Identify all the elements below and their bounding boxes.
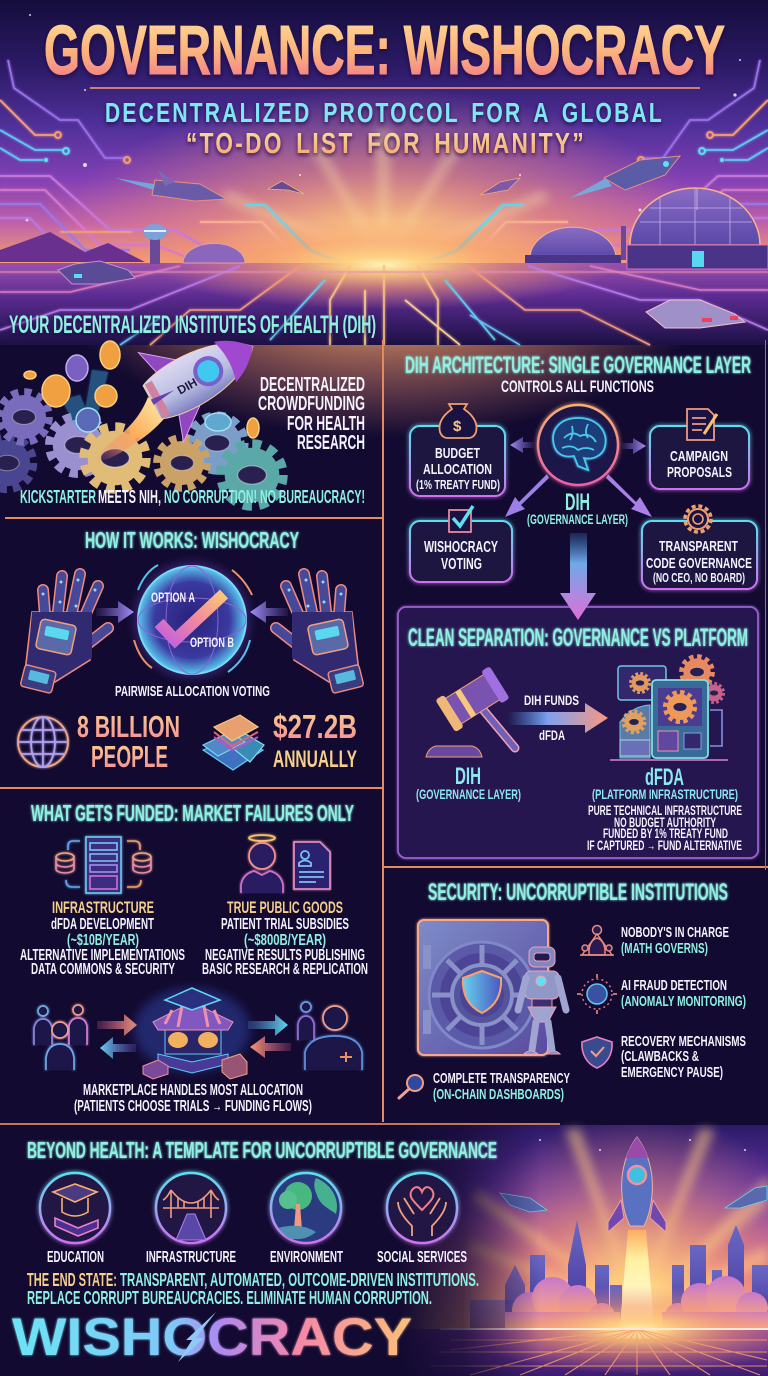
icon: platform machine <box>610 656 728 760</box>
exhaust <box>620 1230 654 1325</box>
icon: money bag: $ <box>453 418 462 435</box>
item: transparency: COMPLETE TRANSPARENCY <box>433 1070 570 1087</box>
icon labels <box>47 1249 467 1266</box>
column: true public goods: (~$800B/YEAR) <box>244 932 326 949</box>
panel: clean separation <box>398 607 758 858</box>
spaceship left <box>500 1193 547 1212</box>
ground <box>400 1329 768 1376</box>
sun rays <box>220 130 550 263</box>
label: DIH <box>416 763 521 802</box>
ground circuits <box>0 265 768 345</box>
column: true public goods: PATIENT TRIAL SUBSIDIES <box>221 916 349 933</box>
icon: money stacks <box>203 715 264 770</box>
coin trails <box>62 370 108 430</box>
subtitle: “TO-DO LIST FOR HUMANITY” <box>186 128 586 160</box>
small spaceship right <box>480 178 520 195</box>
tagline: KICKSTARTER <box>20 486 96 507</box>
small tower right <box>621 226 626 260</box>
illustration: vault <box>418 920 548 1055</box>
icon labels: ENVIRONMENT <box>270 1249 343 1266</box>
arrow labels: DIH FUNDS <box>524 692 579 708</box>
sky <box>400 1125 768 1330</box>
car left <box>58 261 135 284</box>
label: DIH: (GOVERNANCE LAYER) <box>527 512 628 527</box>
illustration: coins <box>24 341 259 438</box>
option labels <box>151 590 234 650</box>
box: campaign <box>650 409 749 489</box>
option labels: OPTION B <box>190 635 234 650</box>
text: decentralized crowdfunding <box>258 374 365 454</box>
circuit lines left <box>0 60 340 264</box>
stat: budget: ANNUALLY <box>273 746 357 773</box>
label: DIH: DIH <box>565 489 590 516</box>
medium dome <box>525 227 621 263</box>
stat: budget: $27.2B <box>273 708 357 745</box>
spaceship right <box>570 156 680 198</box>
spaceship left <box>115 170 226 201</box>
illustration: left hand <box>20 574 108 694</box>
tagline: NO BUREAUCRACY! <box>260 486 365 507</box>
arrow labels <box>524 692 579 743</box>
arrow: DIH down to separation panel <box>560 533 596 620</box>
arrows left of market <box>97 1014 137 1059</box>
arrows to globe <box>96 601 288 623</box>
column: true public goods: BASIC RESEARCH & REPLICATION <box>202 961 368 978</box>
text: decentralized crowdfunding: RESEARCH <box>297 432 365 454</box>
tagline: NO CORRUPTION! <box>164 486 257 507</box>
ground glow <box>467 1286 768 1374</box>
icon: lightning slash <box>178 1312 216 1362</box>
option labels: OPTION A <box>151 590 195 605</box>
panel: security <box>399 879 746 1103</box>
heading: WHAT GETS FUNDED: MARKET FAILURES ONLY <box>31 800 354 826</box>
caption: (PATIENTS CHOOSE TRIALS → FUNDING FLOWS) <box>74 1098 312 1115</box>
icon: globe outline <box>18 717 68 767</box>
tagline: MEETS NIH, <box>98 486 161 507</box>
icon: social services <box>387 1173 457 1243</box>
stat: budget <box>273 708 357 773</box>
column: infrastructure <box>20 898 185 978</box>
ground <box>0 263 768 345</box>
subheading: CONTROLS ALL FUNCTIONS <box>501 377 654 396</box>
icon labels: EDUCATION <box>47 1249 104 1266</box>
text: decentralized crowdfunding: DECENTRALIZED <box>260 374 365 396</box>
small spaceship <box>268 181 304 194</box>
icon: infrastructure <box>156 1173 226 1243</box>
icon: check box <box>449 506 473 532</box>
arrows right of market <box>248 1014 291 1058</box>
spaceship right <box>725 1186 767 1208</box>
box: budget: BUDGET <box>435 445 480 462</box>
icon: server and databases <box>56 837 151 893</box>
ground grid <box>430 1329 767 1375</box>
heading: HOW IT WORKS: WISHOCRACY <box>85 527 299 553</box>
icon: education <box>40 1173 110 1243</box>
text: decentralized crowdfunding: CROWDFUNDING <box>258 393 365 415</box>
icon: document and pen <box>687 409 717 440</box>
icon: document <box>294 842 330 889</box>
icon: person with halo <box>241 835 283 893</box>
item: transparency: (ON-CHAIN DASHBOARDS) <box>433 1086 564 1103</box>
end state text: REPLACE CORRUPT BUREAUCRACIES. ELIMINATE HUMAN CORRUPTION. <box>27 1287 432 1308</box>
horizon line <box>440 1328 768 1330</box>
item: AI fraud detection <box>577 974 746 1014</box>
icon: magnifier <box>399 1075 423 1098</box>
panel: funding <box>20 800 368 1115</box>
icon: network <box>580 926 614 955</box>
column: infrastructure: dFDA DEVELOPMENT <box>51 916 154 933</box>
column: infrastructure: (~$10B/YEAR) <box>67 932 139 949</box>
mountains <box>0 232 145 262</box>
stat: people: PEOPLE <box>91 739 168 774</box>
box: budget <box>410 404 505 496</box>
stat: people: 8 BILLION <box>77 709 180 744</box>
stars <box>539 1139 746 1151</box>
item: recovery <box>582 1033 746 1081</box>
caption <box>74 1082 312 1115</box>
illustration: gears <box>0 392 283 506</box>
box: code governance <box>642 506 757 589</box>
box: campaign: PROPOSALS <box>667 464 732 481</box>
illustration: right hand <box>276 574 364 694</box>
panel: beyond health <box>12 1137 497 1367</box>
circuit lines right <box>428 60 768 264</box>
item: nobody in charge: (MATH GOVERNS) <box>621 940 708 957</box>
label: DIH: DIH <box>455 763 481 790</box>
column: true public goods <box>202 898 368 978</box>
illustration: rocket: DIH <box>175 375 200 397</box>
icon labels: SOCIAL SERVICES <box>377 1249 467 1266</box>
box: budget: (1% TREATY FUND) <box>416 477 500 492</box>
logo: WISHOCRACY <box>12 1308 412 1367</box>
check mark <box>159 594 224 640</box>
box: voting: WISHOCRACY <box>424 539 498 556</box>
sun glow <box>44 88 724 438</box>
skyline <box>470 1220 768 1330</box>
subtitle <box>105 97 664 160</box>
column: infrastructure: ALTERNATIVE IMPLEMENTATIONS <box>20 947 185 964</box>
large dome <box>627 188 768 269</box>
globe <box>134 562 250 678</box>
panel: decentralized institutes of health <box>0 303 376 507</box>
stat: people <box>77 709 180 774</box>
box: voting: VOTING <box>441 556 482 573</box>
box: campaign: CAMPAIGN <box>670 448 728 465</box>
stars <box>26 14 741 222</box>
box: budget: ALLOCATION <box>423 461 492 478</box>
tower <box>143 224 167 264</box>
clouds <box>505 1276 768 1329</box>
icon: patients <box>34 1005 87 1070</box>
end state text: TRANSPARENT, AUTOMATED, OUTCOME-DRIVEN INSTITUTIONS. <box>120 1269 479 1290</box>
arrow: DIH funds dFDA <box>508 703 608 733</box>
icon: gear <box>685 506 711 532</box>
hero scene <box>0 0 768 438</box>
icon labels: INFRASTRUCTURE <box>146 1249 236 1266</box>
orbit arrows <box>134 565 252 672</box>
arrows from brain <box>505 437 652 517</box>
horizon glow <box>154 220 614 310</box>
caption: PAIRWISE ALLOCATION VOTING <box>115 683 270 700</box>
end state text <box>27 1269 479 1308</box>
label: DIH: (GOVERNANCE LAYER) <box>416 786 521 802</box>
scene fade <box>400 1125 540 1376</box>
icon: shield check <box>582 1037 612 1068</box>
column: infrastructure: INFRASTRUCTURE <box>52 898 154 917</box>
end state text: THE END STATE: <box>27 1269 117 1290</box>
item: recovery: (CLAWBACKS & <box>621 1048 699 1065</box>
icon: researchers <box>298 1002 362 1070</box>
launch rays <box>465 1128 768 1310</box>
label: dFDA <box>587 764 742 853</box>
panel: how it works <box>18 527 364 774</box>
label: DIH <box>527 489 628 527</box>
car right <box>646 300 745 328</box>
illustration: rocket flame <box>96 397 168 462</box>
icon: environment <box>271 1173 341 1243</box>
box: voting <box>410 506 512 582</box>
caption: MARKETPLACE HANDLES MOST ALLOCATION <box>83 1082 303 1099</box>
column: infrastructure: DATA COMMONS & SECURITY <box>31 961 175 978</box>
title rule <box>90 87 700 89</box>
column: true public goods: NEGATIVE RESULTS PUBLISHING <box>205 947 365 964</box>
arrow labels: dFDA <box>539 727 565 743</box>
item: nobody in charge <box>580 924 729 957</box>
icon: AI scanner <box>577 974 617 1014</box>
launch glow <box>400 1125 768 1330</box>
icon: gavel <box>426 666 515 757</box>
tagline <box>20 486 365 507</box>
box: code governance: TRANSPARENT <box>659 538 738 555</box>
item: transparency <box>399 1070 570 1103</box>
label: dFDA: dFDA <box>645 764 684 791</box>
icon: brain <box>538 405 618 485</box>
text: decentralized crowdfunding: FOR HEALTH <box>287 413 365 435</box>
panel: architecture <box>405 352 757 589</box>
rocket <box>608 1137 666 1232</box>
panel frame lines <box>0 340 768 1125</box>
small dome <box>183 243 245 263</box>
illustration: robot <box>518 947 566 1054</box>
sky <box>0 0 768 263</box>
column: true public goods: TRUE PUBLIC GOODS <box>227 898 343 917</box>
icon: marketplace <box>134 988 250 1079</box>
heading: YOUR DECENTRALIZED INSTITUTES OF HEALTH (DIH) <box>9 311 376 339</box>
illustration: rocket <box>128 303 277 446</box>
rocket launch scene <box>400 1125 768 1376</box>
